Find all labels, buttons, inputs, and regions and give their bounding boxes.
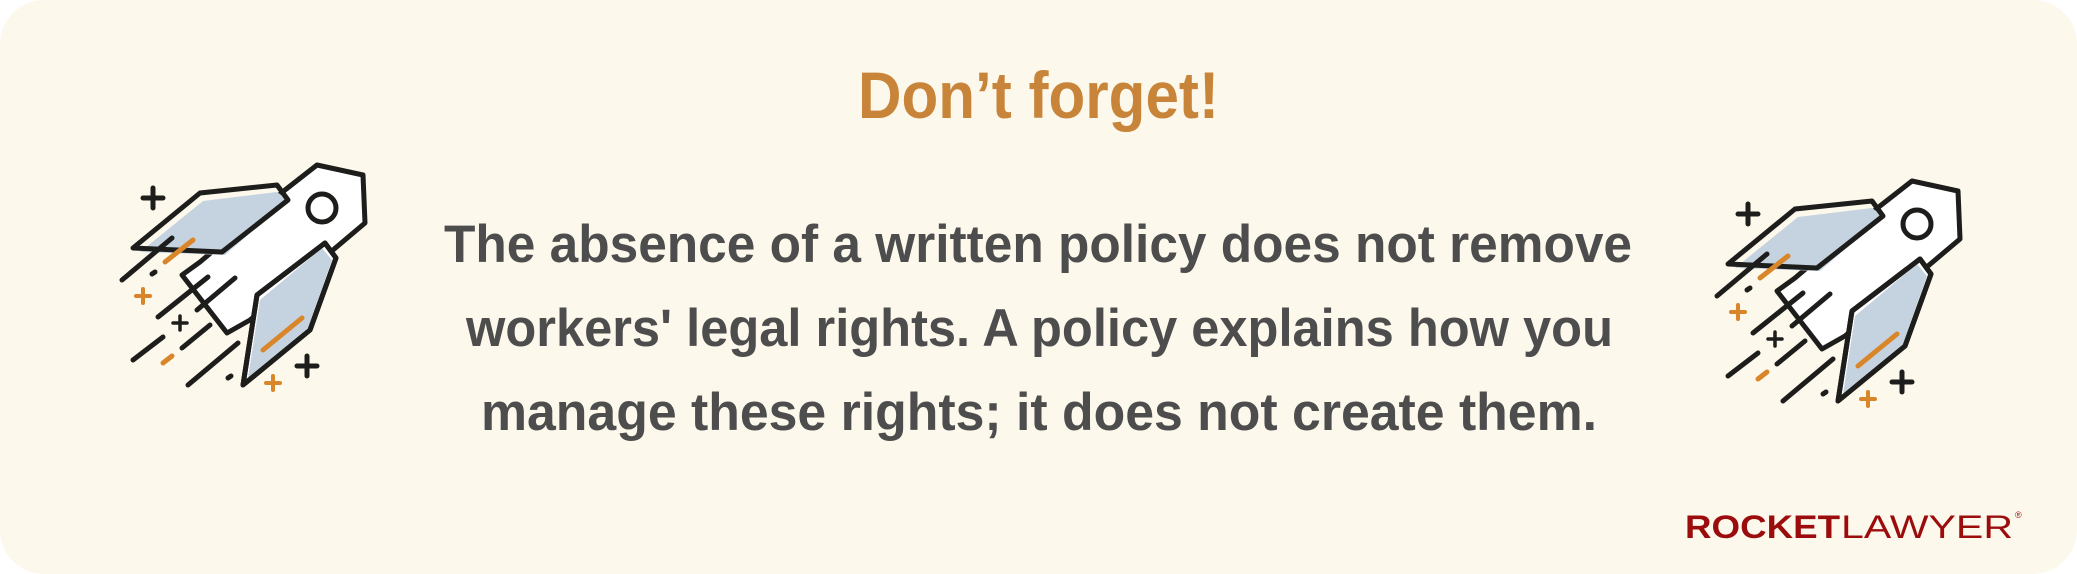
icon: rocket right [1714, 178, 1962, 408]
body text [444, 215, 1632, 442]
body text: manage these rights; it does not create them. [481, 383, 1597, 442]
title: Don’t forget! [858, 58, 1219, 132]
logo: ® [2015, 510, 2022, 520]
logo [1685, 509, 2022, 545]
body text: The absence of a written policy does not remove [444, 215, 1632, 274]
logo: ROCKET [1685, 509, 1841, 545]
logo: LAWYER [1841, 509, 2013, 545]
icon: rocket left [120, 162, 368, 392]
body text: workers' legal rights. A policy explains how you [465, 299, 1613, 358]
